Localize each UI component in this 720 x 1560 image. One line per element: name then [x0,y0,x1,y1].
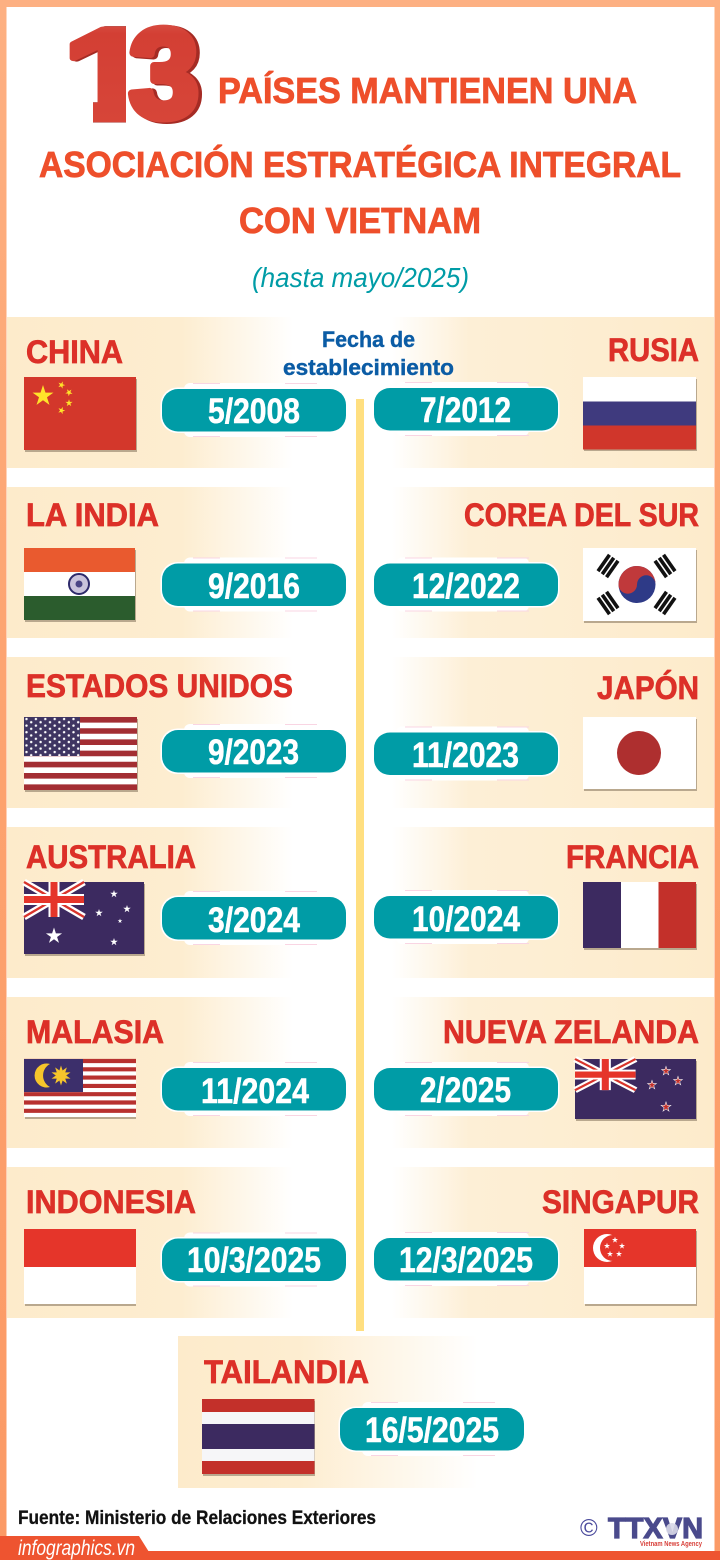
date pill: 3/2024: 3/2024 [208,901,300,940]
heading: date column: Fecha de [322,327,415,352]
entry: Malasia: MALASIA [26,1014,164,1050]
icon: 3D number 13: 3 [129,3,199,144]
timeline vertical line [356,399,364,1331]
flag: Indonesia [24,1229,136,1306]
flag: China [24,377,137,452]
entry: Corea del Sur: COREA DEL SUR [464,497,699,533]
flag: Tailandia [202,1399,315,1476]
entry: Indonesia: INDONESIA [26,1184,196,1220]
entry: Malasia [24,1014,348,1119]
panel: row backgrounds [7,317,714,1488]
entry: Indonesia [24,1184,348,1306]
icon: 3D number 13: 1 [62,2,156,147]
entry: Francia: FRANCIA [566,839,699,875]
date pill: 9/2016: 9/2016 [208,567,300,606]
entry: Estados Unidos [24,668,348,792]
entry: Australia: AUSTRALIA [26,839,196,875]
date pill: 2/2025: 2/2025 [420,1071,511,1110]
icon: 3D number 13: 3 [132,4,202,145]
entry: Tailandia: TAILANDIA [204,1354,369,1390]
flag: La India [24,548,136,622]
entry: Japón: JAPÓN [597,670,699,706]
logo: TTXVN: TTXVN [608,1513,703,1545]
logo: TTXVN: Vietnam News Agency [640,1539,703,1548]
flag: Francia [583,882,697,950]
date pill: 10/2024 [372,890,560,944]
date pill: 3/2024 [160,891,348,945]
entry: Nueva Zelanda: NUEVA ZELANDA [443,1014,699,1050]
title: ASOCIACIÓN ESTRATÉGICA INTEGRAL [39,143,681,185]
source note: Fuente: Ministerio de Relaciones Exteriores [18,1508,376,1529]
date pill: 12/3/2025: 12/3/2025 [399,1241,533,1280]
date pill: 16/5/2025: 16/5/2025 [365,1411,499,1450]
flag: Estados Unidos [24,717,138,792]
heading: date column: establecimiento [283,355,454,380]
entry: China: CHINA [26,334,123,370]
flag: Japón [583,717,697,791]
date pill: 10/3/2025: 10/3/2025 [187,1241,321,1280]
date pill: 11/2024: 11/2024 [201,1072,309,1111]
flag: Singapur [584,1229,697,1306]
date pill: 7/2012 [372,382,560,436]
entry: La India [24,497,348,622]
date pill: 10/2024: 10/2024 [412,900,520,939]
entry: Singapur: SINGAPUR [542,1184,699,1220]
icon: 3D number 13: 1 [65,2,159,147]
flag: Corea del Sur [583,548,697,623]
date pill: 12/2022: 12/2022 [412,567,520,606]
date pill: 5/2008: 5/2008 [208,392,300,431]
footer bar [0,1536,720,1560]
entry: Francia [372,839,699,950]
heading: date column [283,327,454,380]
date pill: 10/3/2025 [160,1232,348,1286]
date pill: 9/2016 [160,558,348,612]
entry: Rusia: RUSIA [608,332,699,368]
date pill: 2/2025 [372,1062,560,1116]
title: PAÍSES MANTIENEN UNA [218,70,637,111]
date pill: 11/2023 [372,726,560,780]
date pill: 9/2023 [160,724,348,778]
entry: Tailandia [202,1354,526,1476]
entry: Estados Unidos: ESTADOS UNIDOS [26,668,293,704]
logo: TTXVN: © [580,1515,598,1542]
date pill: 9/2023: 9/2023 [208,733,299,772]
date pill: 5/2008 [160,383,348,437]
flag: Rusia [583,377,697,451]
flag: Nueva Zelanda [575,1059,697,1121]
date pill: 11/2023: 11/2023 [412,736,519,775]
entry: La India: LA INDIA [26,497,159,533]
entry: China [24,334,348,452]
icon: 3D number 13 [70,24,202,124]
entry: Japón [372,670,699,791]
title: CON VIETNAM [239,200,481,241]
date pill: 7/2012: 7/2012 [420,391,511,430]
date pill: 11/2024 [160,1062,348,1116]
title [39,70,681,241]
entry: Corea del Sur [372,497,699,623]
entry: Rusia [372,332,699,451]
flag: Malasia [24,1059,136,1119]
flag: Australia [24,882,145,956]
entry: Nueva Zelanda [372,1014,699,1121]
entry: Australia [24,839,348,956]
date pill: 12/2022 [372,558,560,612]
entry: Singapur [372,1184,699,1306]
footer site name: infographics.vn [18,1537,135,1560]
date pill: 12/3/2025 [372,1232,560,1286]
date pill: 16/5/2025 [338,1402,526,1456]
subtitle: (hasta mayo/2025) [252,262,469,293]
